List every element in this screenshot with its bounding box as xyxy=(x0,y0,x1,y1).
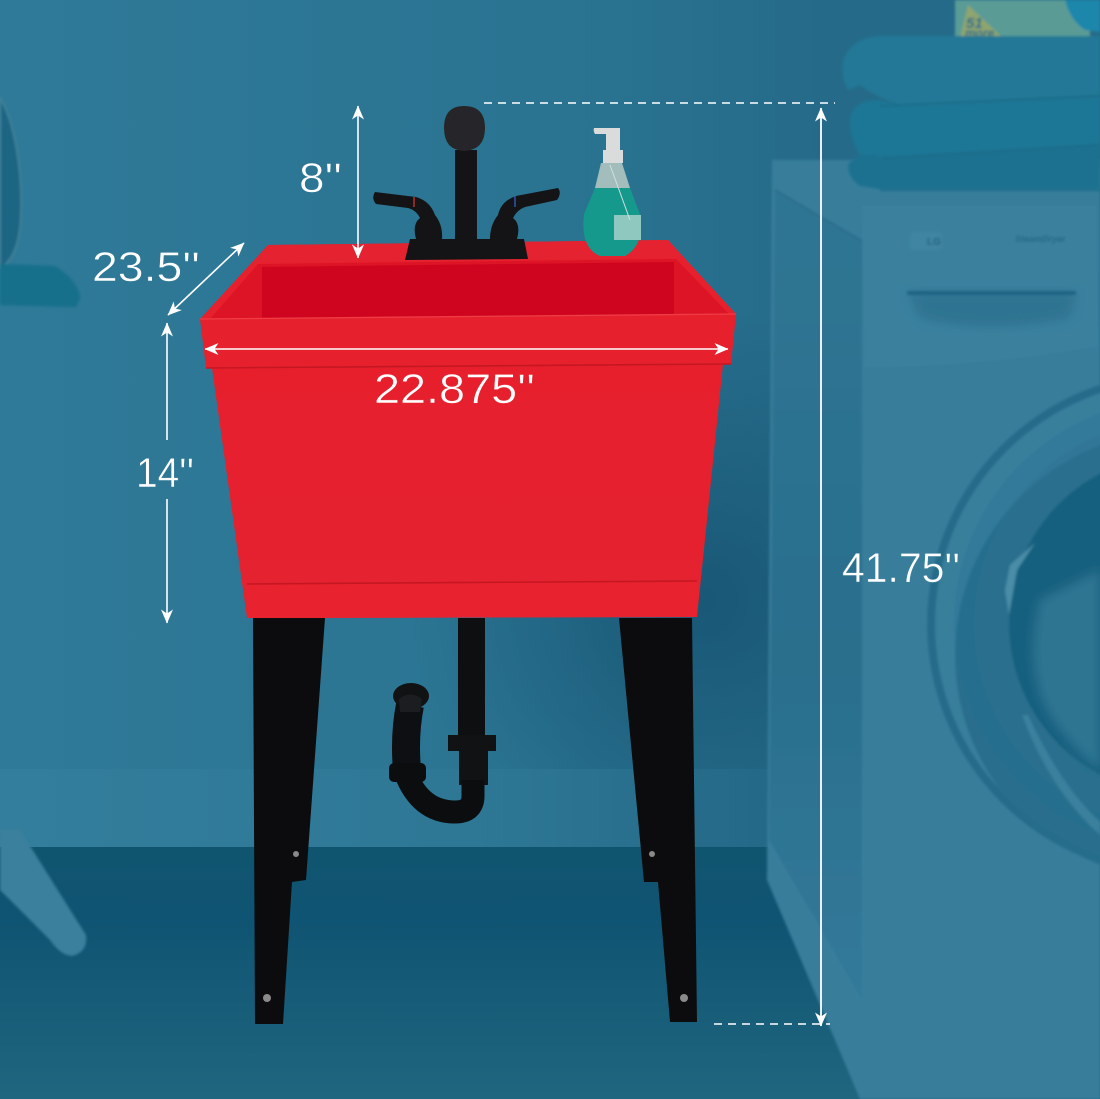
dimension: 8 inch height: 8'' xyxy=(299,154,342,201)
dimension: 41.75 inch total height: 41.75'' xyxy=(842,544,960,591)
background: left objects xyxy=(0,98,86,956)
soap dispenser xyxy=(583,128,641,256)
background: floor xyxy=(0,847,860,1099)
background: washing machine xyxy=(767,160,1100,1099)
sink tub xyxy=(200,240,736,618)
background: washing machine: SteamDryer xyxy=(1015,234,1066,244)
dimension: 23.5 inch depth: 23.5'' xyxy=(92,243,200,290)
faucet xyxy=(373,106,560,260)
dimension: 23.5 inch depth xyxy=(92,243,244,315)
dimension: 14 inch bowl depth: 14'' xyxy=(136,449,194,496)
dimension: 22.875 inch width: 22.875'' xyxy=(374,365,535,412)
sink legs xyxy=(253,618,697,1024)
background: towels and detergent xyxy=(843,0,1100,190)
background: washing machine: LG xyxy=(927,237,941,248)
background: towels and detergent: more xyxy=(965,26,995,40)
drain pipe xyxy=(389,618,496,812)
background: towels and detergent: 51 xyxy=(966,15,983,32)
